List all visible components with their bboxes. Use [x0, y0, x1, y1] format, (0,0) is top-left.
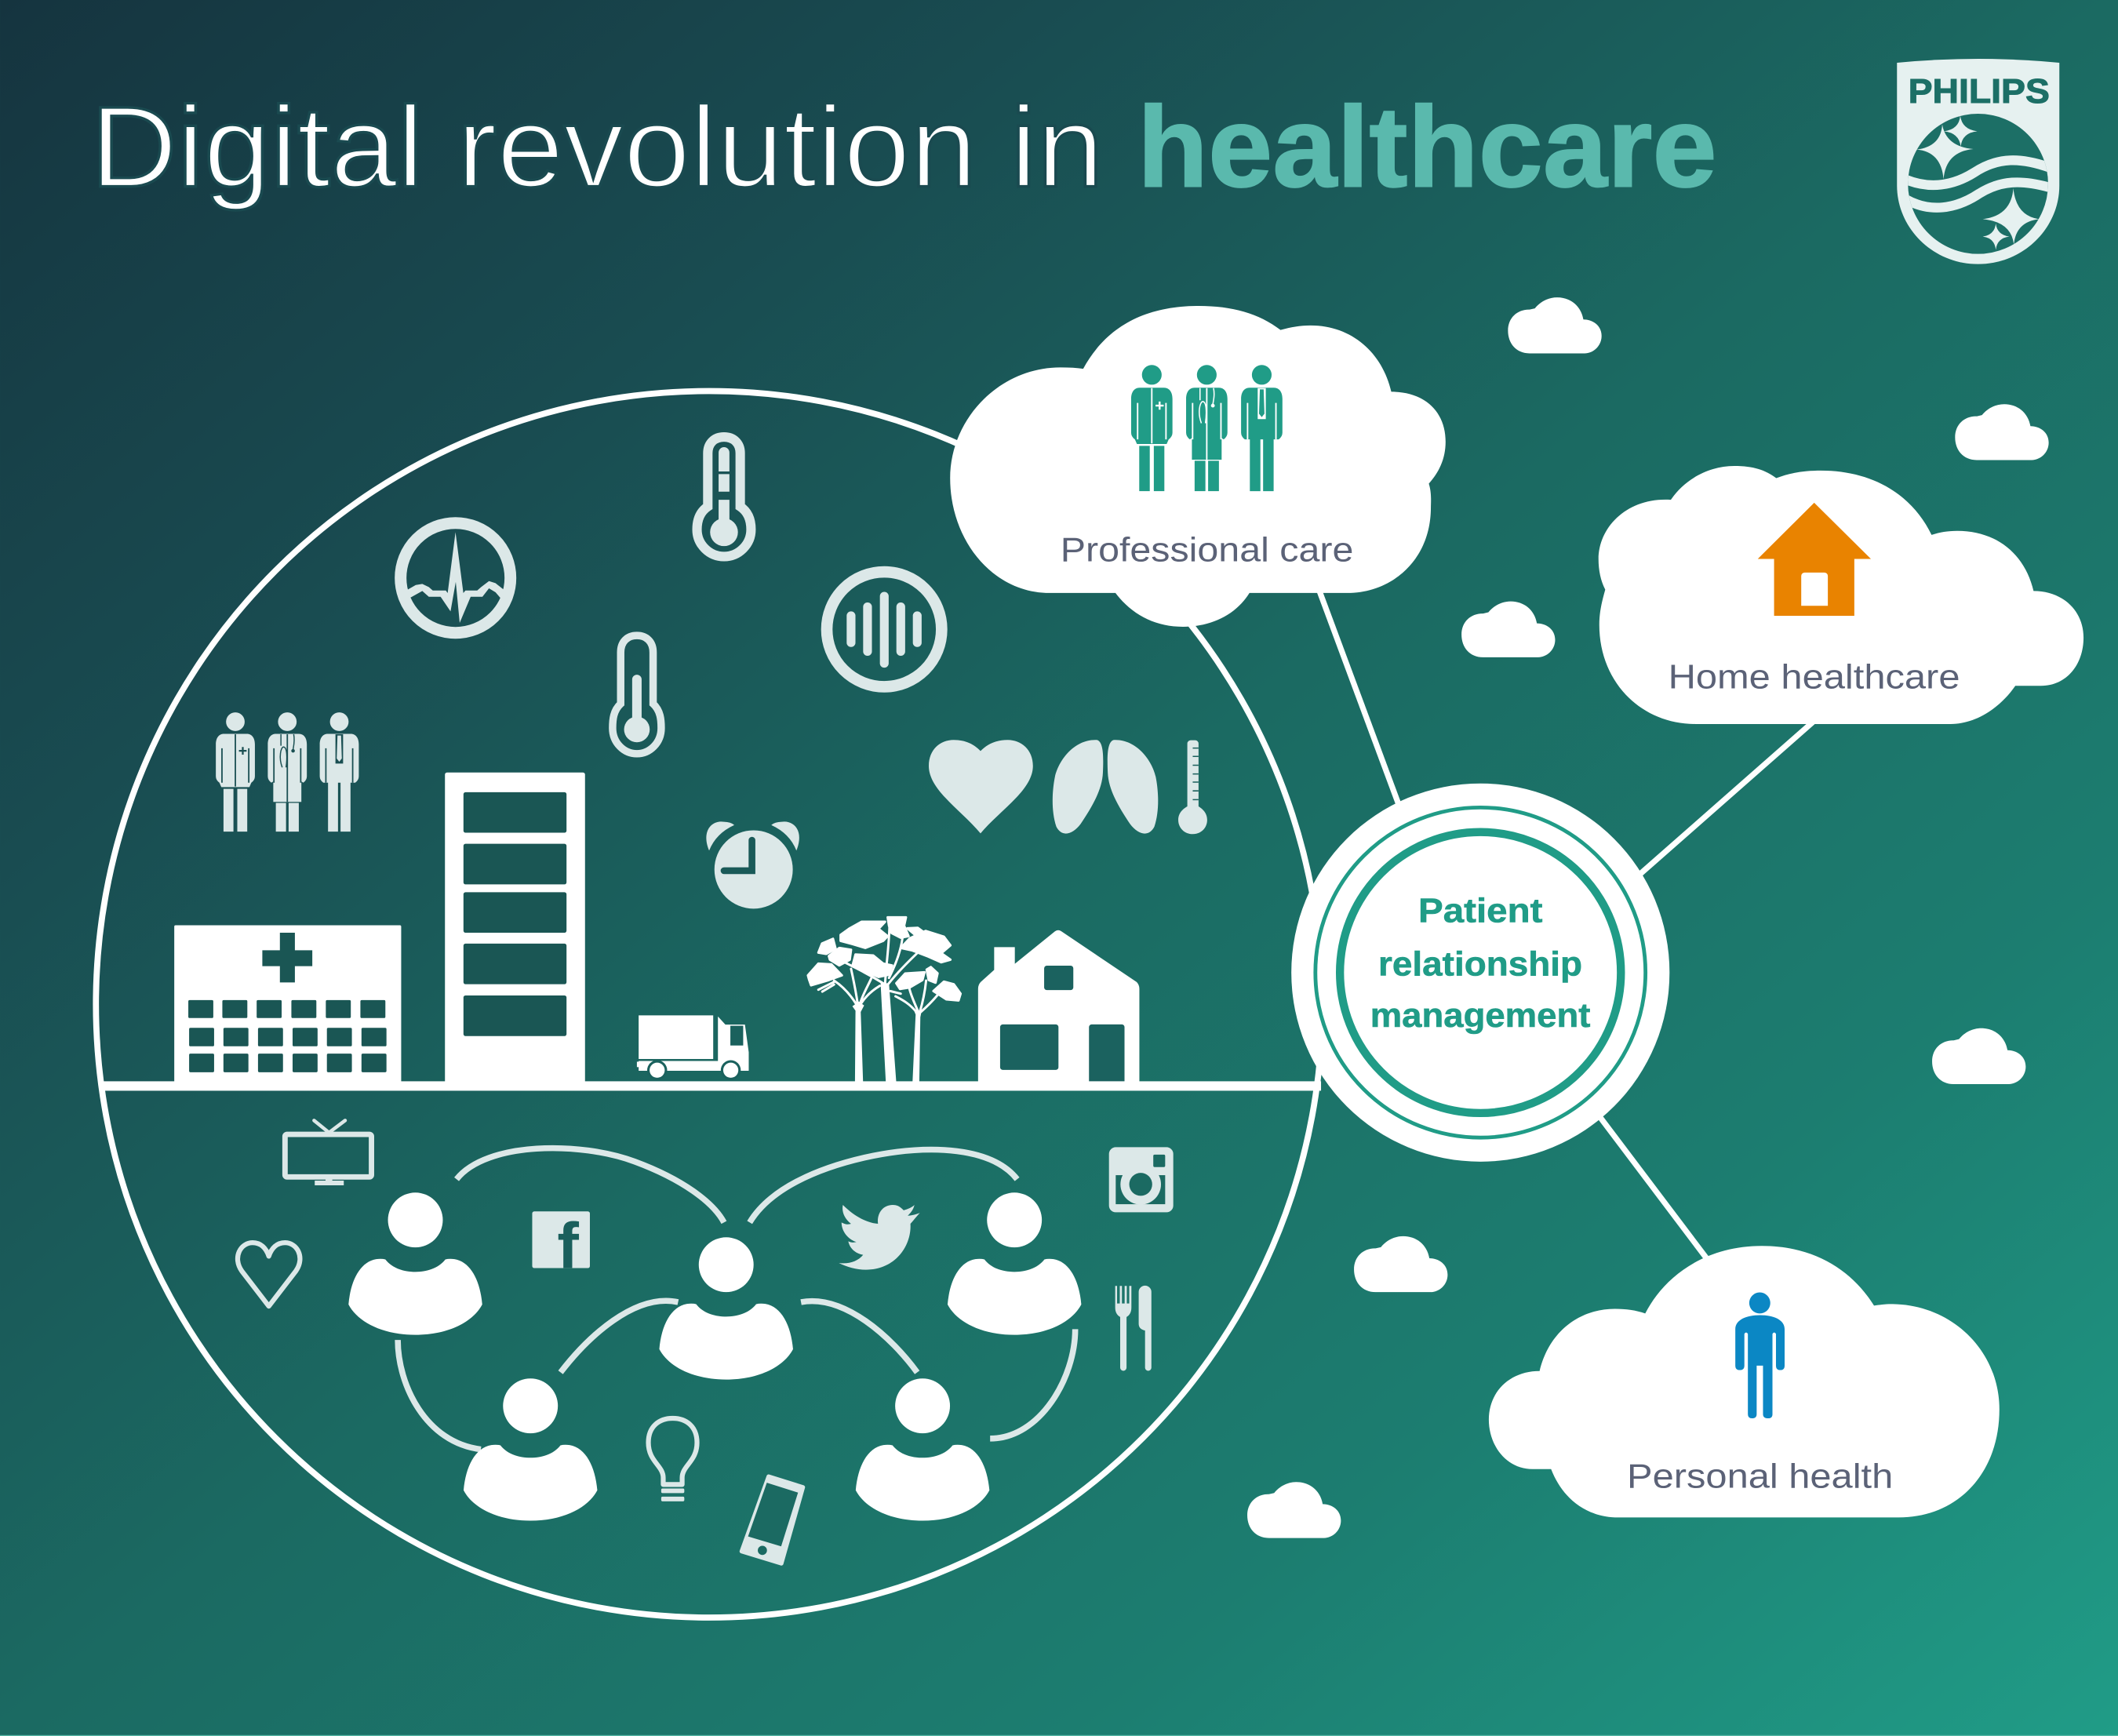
- hub label: relationship: [1378, 945, 1582, 984]
- icon: thermometer top: [697, 437, 751, 556]
- icon: facebook: [532, 1210, 590, 1283]
- cloud: Professional care: [950, 306, 1446, 627]
- icon: twitter bird: [839, 1205, 920, 1270]
- hub label: [1370, 892, 1591, 1035]
- logo: Philips shield: [1897, 59, 2059, 264]
- icon: light bulb: [649, 1418, 697, 1501]
- title: highlighted word: healthcare: [1137, 84, 1717, 212]
- icon: lungs: [1053, 740, 1158, 834]
- icon: orange house: [1758, 503, 1871, 616]
- logo: Philips shield: PHILIPS: [1909, 73, 2050, 111]
- small clouds: [1247, 297, 2049, 1538]
- hub: Patient relationship management: [1291, 784, 1669, 1162]
- person: top right: [948, 1192, 1081, 1335]
- person: centre: [659, 1237, 793, 1380]
- icon: hospital building: [174, 926, 401, 1085]
- icon: tower building: [445, 773, 585, 1085]
- icon: trees: [808, 917, 961, 1083]
- icon: ECG gauge: [401, 523, 511, 633]
- icon: blue person: [1735, 1293, 1785, 1418]
- label: Professional care: Professional care: [1061, 530, 1353, 569]
- connector lines to the hub: [1316, 580, 1817, 1263]
- icon: sound wave circle: [827, 572, 941, 686]
- hub label: Patient: [1418, 892, 1543, 930]
- icon: fork and knife: [1115, 1286, 1152, 1370]
- title: [90, 84, 1717, 212]
- label: Personal health: Personal health: [1627, 1458, 1893, 1496]
- circle outline: [96, 391, 1323, 1618]
- icon: three medical staff (small): [216, 712, 358, 832]
- icon: outline heart: [238, 1243, 300, 1306]
- icon: thermometer middle: [613, 635, 661, 754]
- icon: television: [285, 1120, 372, 1185]
- ground line: [101, 1081, 1321, 1090]
- title: light part: Digital revolution in: [90, 84, 1104, 212]
- icon: solid heart: [929, 740, 1033, 833]
- hub label: management: [1370, 996, 1591, 1035]
- icon: small thermometer: [1178, 741, 1207, 834]
- person: bottom right: [856, 1378, 989, 1521]
- cloud: Personal health: [1489, 1246, 2000, 1517]
- people network: [348, 1192, 1081, 1521]
- label: Home healthcare: Home healthcare: [1669, 657, 1960, 696]
- social network arcs: [398, 1148, 1075, 1450]
- icon: three medical staff: [1131, 365, 1283, 491]
- icon: smartphone: [741, 1476, 803, 1563]
- cloud: Home healthcare: [1599, 466, 2083, 724]
- icon: delivery truck: [637, 1015, 748, 1080]
- panel: main circle: [96, 391, 1323, 1618]
- person: bottom left: [464, 1378, 597, 1521]
- icon: alarm clock: [706, 821, 799, 908]
- icon: instagram: [1109, 1147, 1174, 1212]
- icon: facebook: f: [557, 1210, 579, 1283]
- person: top left: [348, 1192, 482, 1335]
- icon: house: [978, 930, 1139, 1083]
